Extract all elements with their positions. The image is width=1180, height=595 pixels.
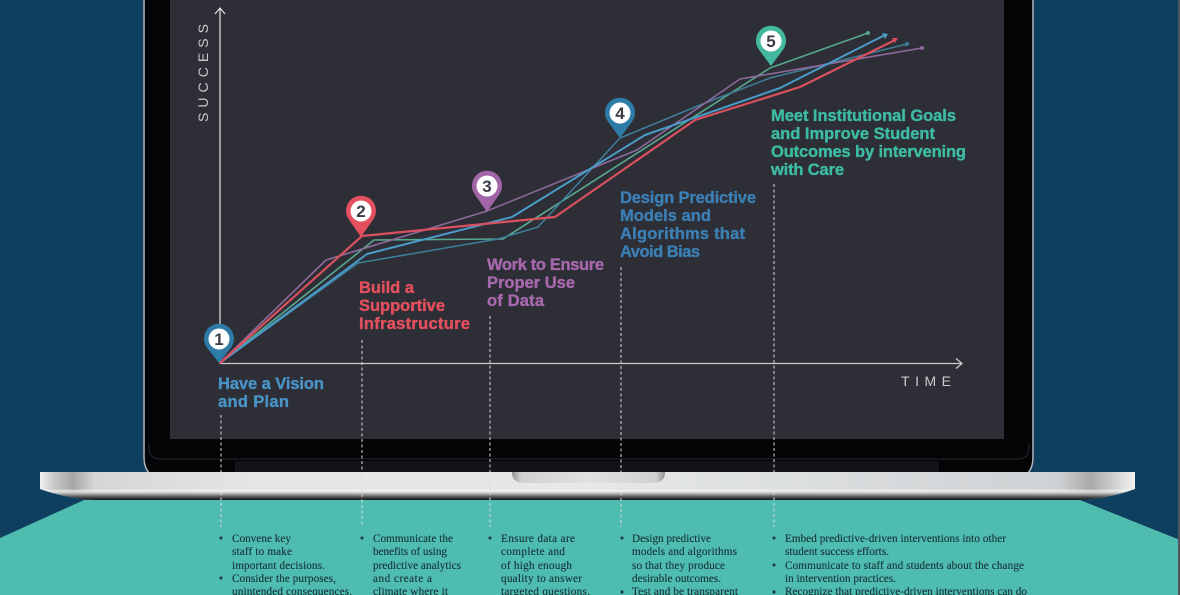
heading 4: Models and xyxy=(620,207,711,225)
text column 4: so that they produce xyxy=(632,560,725,572)
heading 2: Build a xyxy=(359,279,415,297)
line: bright blue xyxy=(220,35,885,363)
heading 2: Supportive xyxy=(359,297,445,315)
y axis xyxy=(215,8,225,363)
heading 4 xyxy=(620,189,756,261)
heading 5 xyxy=(770,107,966,179)
heading 1: and Plan xyxy=(218,393,289,411)
heading 5: Meet Institutional Goals xyxy=(771,107,956,125)
bezel lower band xyxy=(235,461,939,472)
heading 5: Outcomes by intervening xyxy=(771,143,966,161)
base shading xyxy=(40,472,1135,500)
heading 5: with Care xyxy=(770,161,844,179)
y axis label: SUCCESS xyxy=(195,24,211,122)
text column 5: student success efforts. xyxy=(785,546,889,558)
axes xyxy=(195,8,962,389)
line: slate blue xyxy=(220,44,907,363)
pin 3: 3 xyxy=(482,177,492,196)
x axis label: TIME xyxy=(901,373,951,389)
heading 4: Design Predictive xyxy=(620,189,756,207)
text column 4: desirable outcomes. xyxy=(632,573,721,585)
pin 1: 1 xyxy=(214,330,224,349)
text column 2: predictive analytics xyxy=(373,560,461,572)
heading 1 xyxy=(218,375,324,411)
heading 1: Have a Vision xyxy=(218,375,324,393)
teal base panel xyxy=(0,500,1180,595)
text column 4: Design predictive xyxy=(632,533,711,545)
bezel lower highlight xyxy=(149,443,1029,459)
text column 1: Convene key xyxy=(232,533,291,545)
pin 3 xyxy=(472,171,502,212)
line: red xyxy=(220,40,895,363)
text column 4: models and algorithms xyxy=(632,546,737,558)
trackpad notch xyxy=(512,472,665,483)
right edge strip xyxy=(1178,0,1180,595)
text column 1 xyxy=(220,533,352,595)
heading 2: Infrastructure xyxy=(359,315,470,333)
heading 4: Avoid Bias xyxy=(620,243,700,261)
pin 5 xyxy=(756,26,786,66)
pin 5: 5 xyxy=(766,32,776,51)
text column 3: Ensure data are xyxy=(501,533,575,545)
pin 4: 4 xyxy=(615,104,625,123)
heading 3: Work to Ensure xyxy=(487,256,604,274)
line: green xyxy=(220,33,868,363)
heading 3: Proper Use xyxy=(487,274,575,292)
text column 3: quality to answer xyxy=(501,573,582,585)
text column 3: complete and xyxy=(501,546,565,558)
heading 3: of Data xyxy=(487,292,545,310)
pin 2 xyxy=(346,196,376,237)
line end markers xyxy=(866,31,924,50)
text column 2: Communicate the xyxy=(373,533,453,545)
heading 2 xyxy=(359,279,470,333)
pin 2: 2 xyxy=(356,202,366,221)
heading 4: Algorithms that xyxy=(620,225,746,243)
pin 4 xyxy=(605,98,635,138)
x axis xyxy=(220,358,962,368)
line: purple xyxy=(220,48,922,363)
text column 2: and create a xyxy=(373,573,432,585)
pin 1 xyxy=(204,324,234,363)
text column 2: benefits of using xyxy=(373,546,447,558)
laptop bezel xyxy=(143,0,1034,473)
heading 3 xyxy=(487,256,604,310)
bezel silver edge xyxy=(144,0,1033,473)
text column 3: of high enough xyxy=(501,560,572,572)
heading 5: and Improve Student xyxy=(771,125,936,143)
text column 1: important decisions. xyxy=(232,560,325,572)
line chart xyxy=(220,31,924,363)
text column 5: in intervention practices. xyxy=(785,573,896,585)
text column 4 xyxy=(620,533,739,595)
text column 1: Consider the purposes, xyxy=(232,573,336,585)
text column 5: Embed predictive-driven interventions into other xyxy=(785,533,1006,545)
text column 1: staff to make xyxy=(232,546,292,558)
laptop base xyxy=(40,472,1135,500)
laptop xyxy=(40,0,1135,500)
text column 2 xyxy=(360,533,461,595)
text column 5 xyxy=(772,533,1027,595)
screen xyxy=(170,0,1004,439)
dashed connectors xyxy=(221,184,774,527)
text column 3 xyxy=(488,533,590,595)
text column 5: Communicate to staff and students about the change xyxy=(785,560,1024,572)
